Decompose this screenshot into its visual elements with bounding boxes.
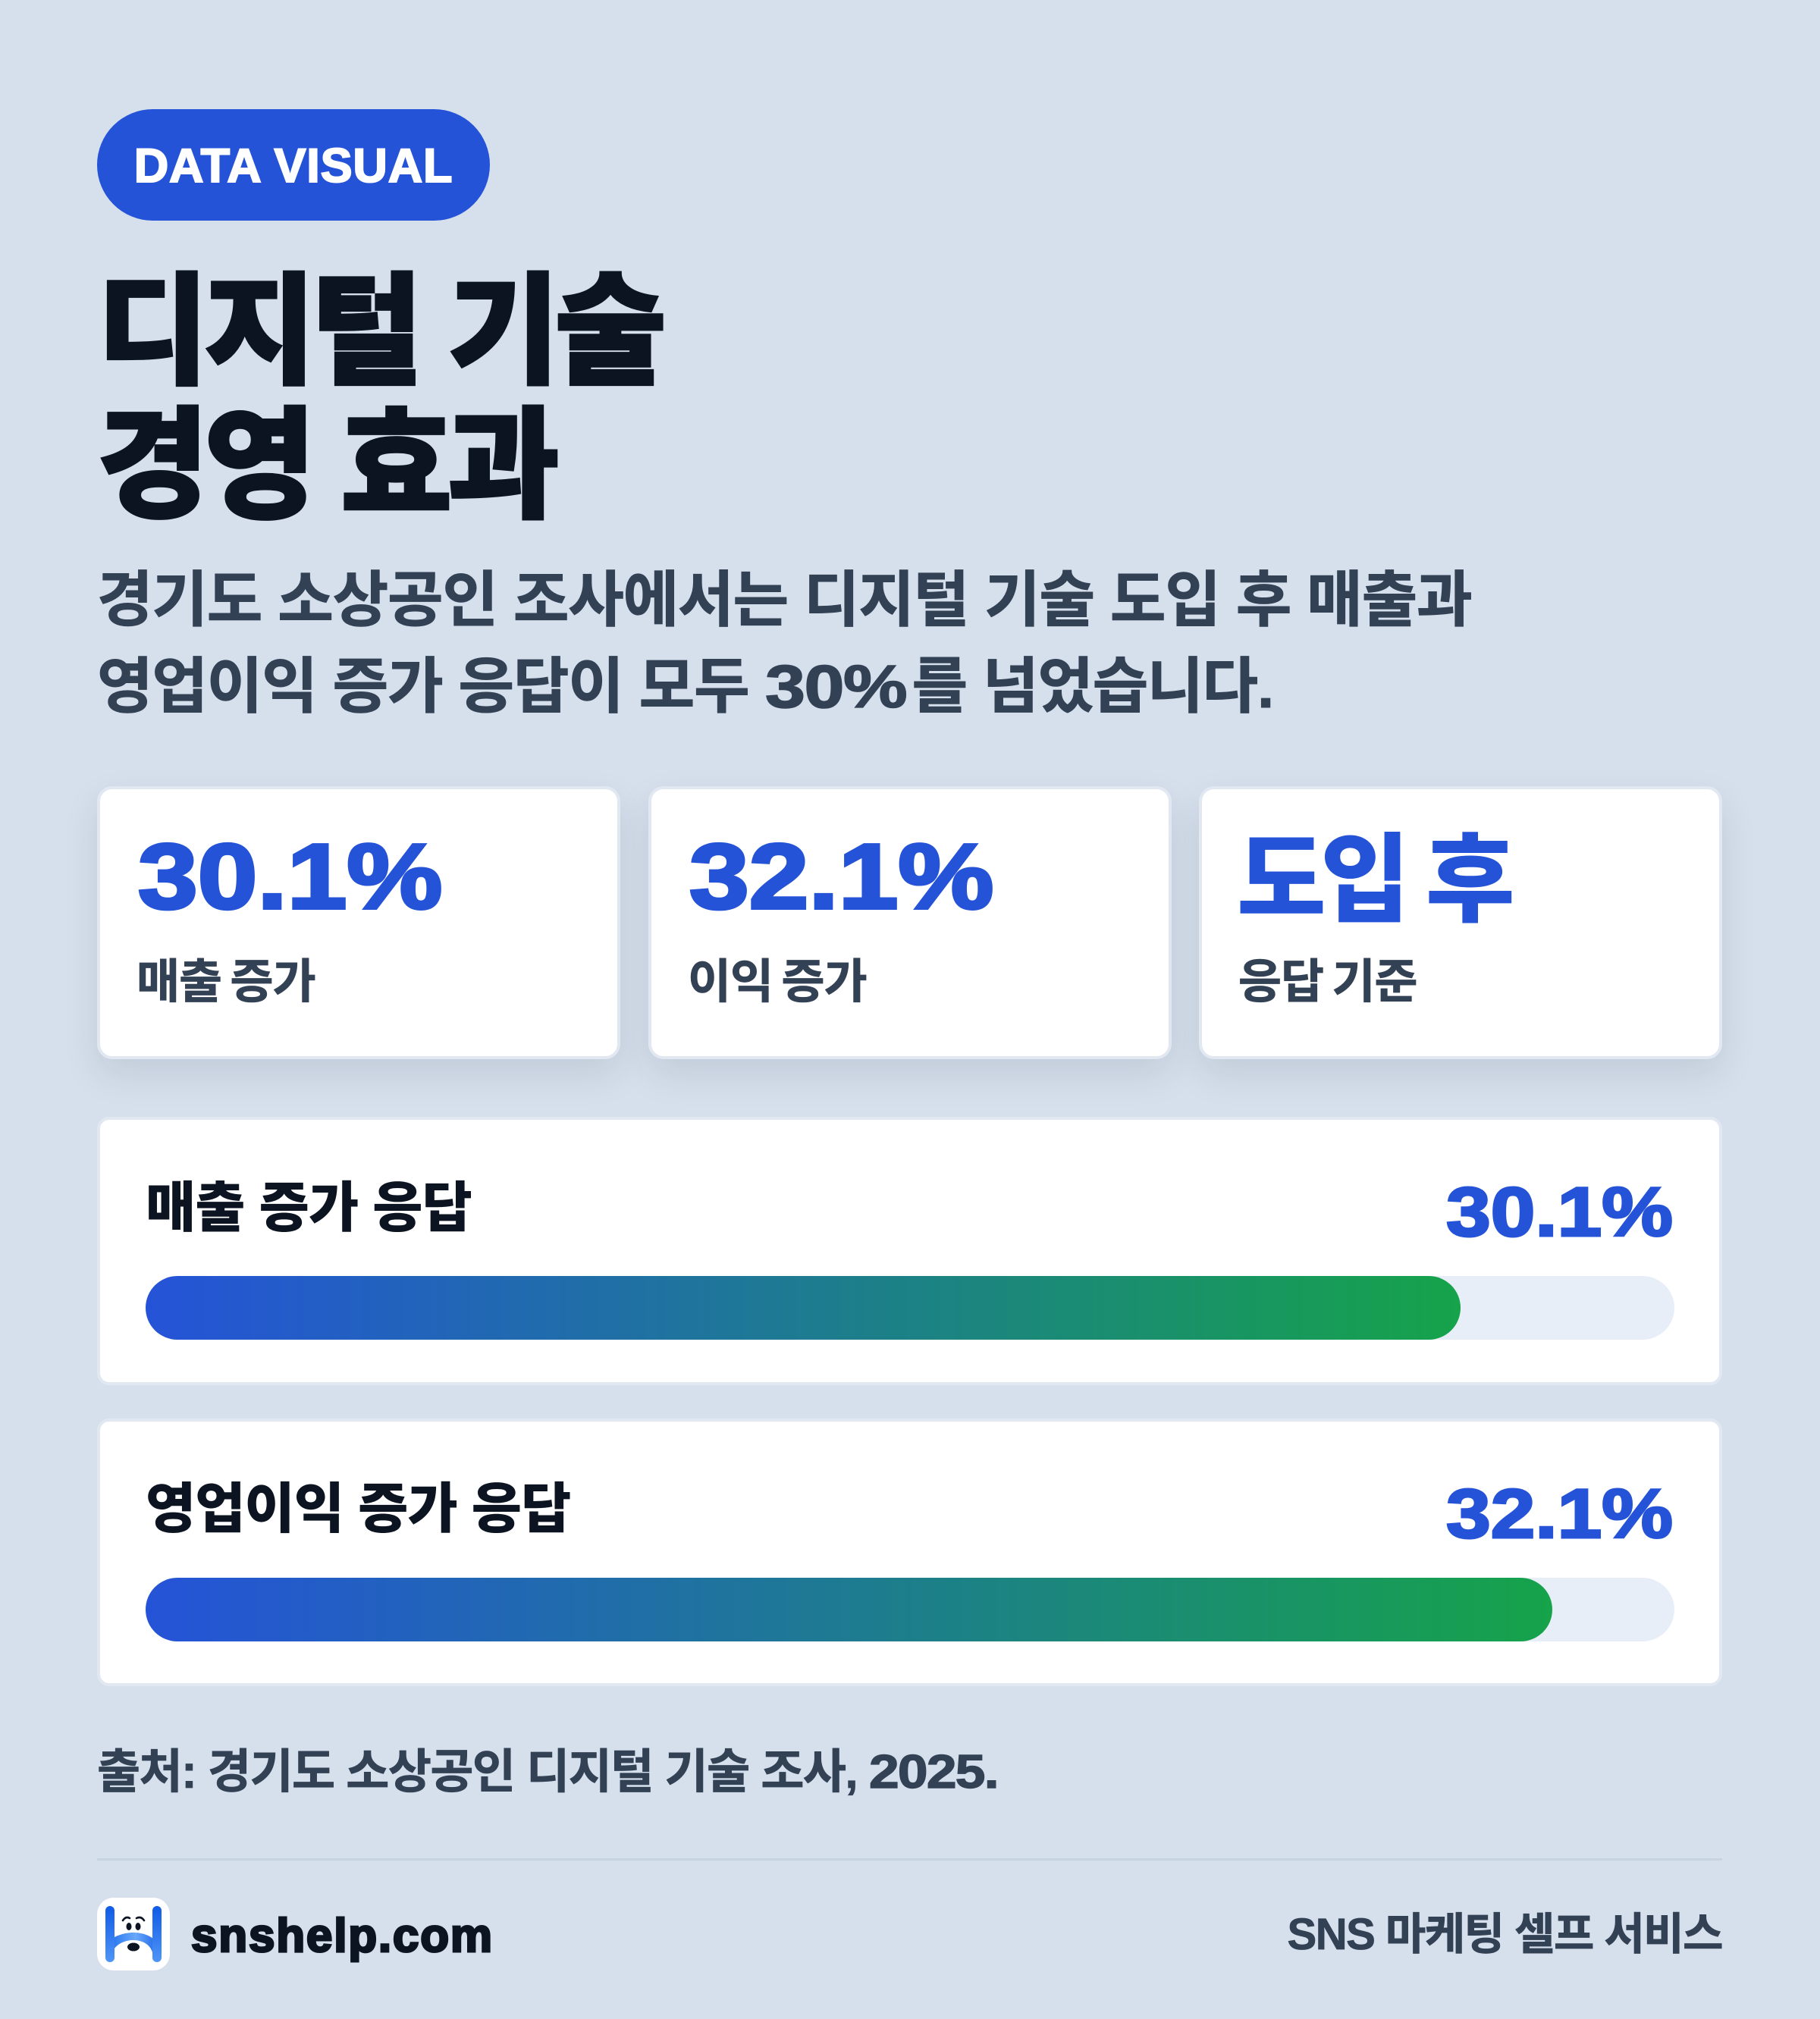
- bar track: [146, 1276, 1674, 1340]
- title: 경영 효과: [97, 368, 555, 544]
- stat value: 32.1%: [689, 825, 993, 928]
- bar value: 32.1%: [1446, 1475, 1673, 1553]
- source note: 출처: 경기도 소상공인 디지털 기술 조사,: [97, 1746, 857, 1798]
- source note: 2025.: [869, 1746, 998, 1798]
- stat label: 매출 증가: [136, 943, 315, 1011]
- subtitle text: 30%: [765, 653, 906, 720]
- stat value: 30.1%: [138, 825, 442, 928]
- bar fill: [146, 1276, 1461, 1340]
- stat label: 이익 증가: [688, 943, 867, 1011]
- panel: 영업이익 증가 응답 bar: [97, 1419, 1722, 1686]
- footer tagline: SNS 마케팅 셀프 서비스: [1288, 1910, 1722, 1959]
- subtitle text: 경기도 소상공인 조사에서는 디지털 기술 도입 후 매출과: [97, 566, 1471, 634]
- title: [97, 234, 664, 544]
- bar fill: [146, 1578, 1552, 1641]
- panel: 매출 증가 응답 bar: [97, 1117, 1722, 1385]
- stat label: 응답 기준: [1238, 943, 1417, 1011]
- bar label: 매출 증가 응답: [146, 1163, 472, 1243]
- stat card: 도입 후: [1199, 786, 1722, 1059]
- icon: snshelp logo: [97, 1898, 170, 1970]
- badge: DATA VISUAL: [97, 109, 490, 221]
- badge: DATA VISUAL: DATA VISUAL: [134, 140, 453, 193]
- subtitle text: [97, 566, 1471, 720]
- stat card: 이익 증가: [648, 786, 1172, 1059]
- bar value: 30.1%: [1446, 1174, 1673, 1251]
- title: 디지털 기술: [97, 234, 662, 409]
- stat value: 도입 후: [1237, 801, 1509, 942]
- subtitle text: 영업이익 증가 응답이 모두 를 넘었습니다.: [97, 653, 1273, 720]
- brand name: snshelp.com: [191, 1910, 494, 1962]
- stat card: 매출 증가: [97, 786, 620, 1059]
- bar label: 영업이익 증가 응답: [146, 1464, 570, 1544]
- bar track: [146, 1578, 1674, 1641]
